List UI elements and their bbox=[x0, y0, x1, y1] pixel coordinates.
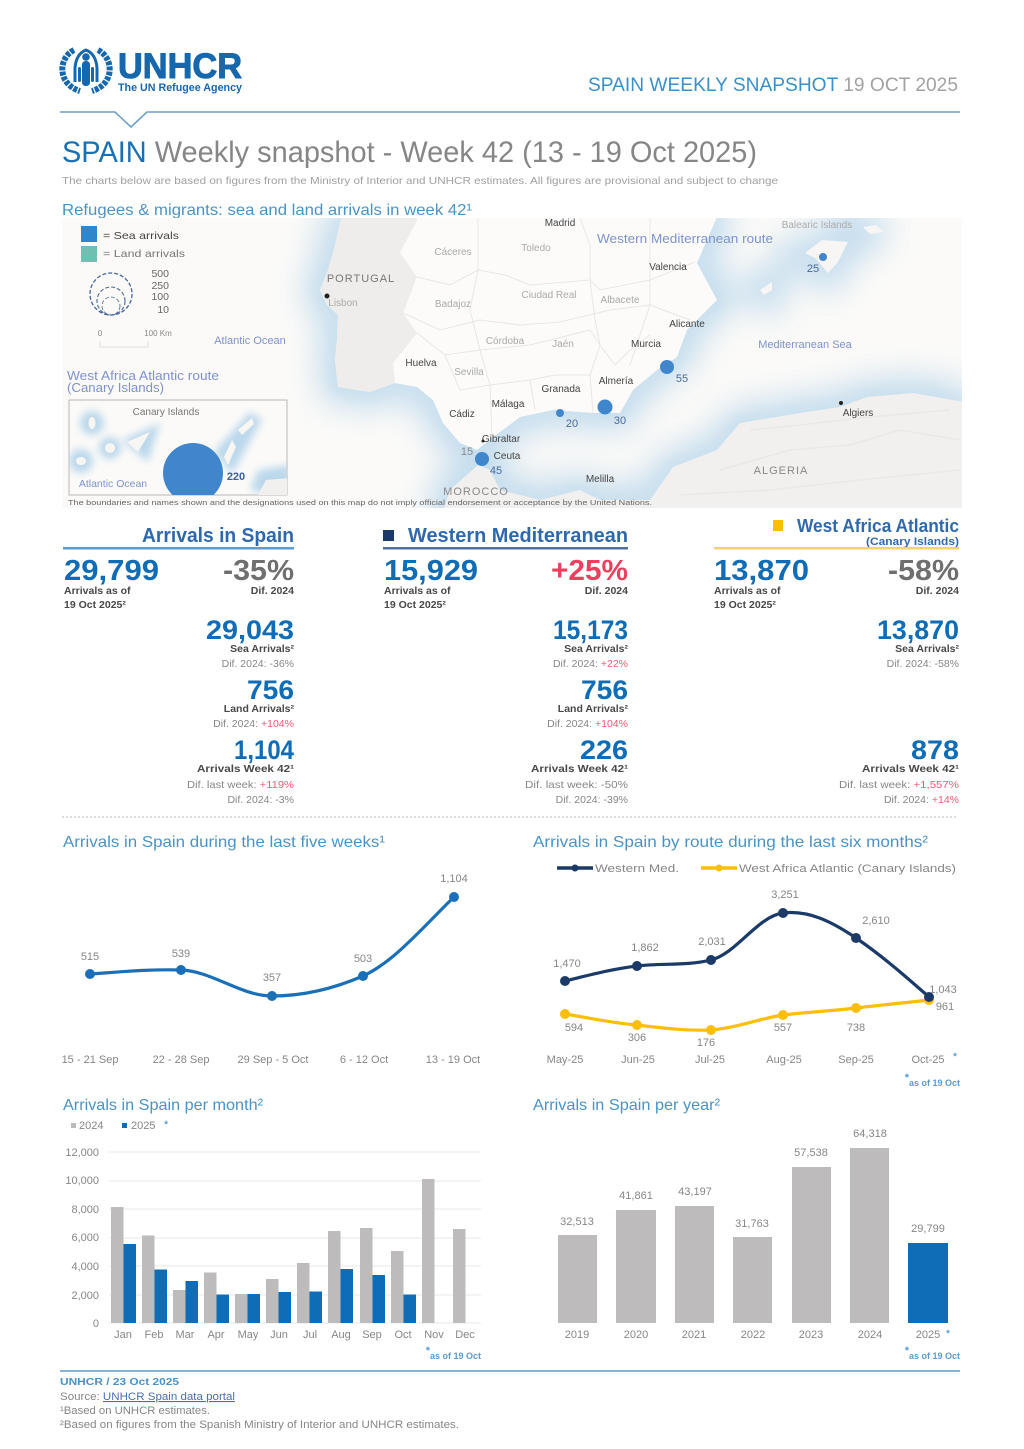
year bars bbox=[558, 1148, 948, 1323]
data labels bbox=[553, 889, 957, 1049]
chart heading: Arrivals in Spain during the last five weeks¹ bbox=[63, 834, 385, 851]
narrow coastal glow bbox=[320, 210, 970, 520]
sea arrivals: Dif. 2024: +22% bbox=[553, 658, 628, 670]
grid lines and y axis: 0 bbox=[93, 1318, 99, 1330]
line series bbox=[90, 897, 454, 996]
UNHCR logo bbox=[62, 47, 243, 94]
month labels: May bbox=[238, 1329, 259, 1341]
as-of note: as of 19 Oct bbox=[909, 1351, 960, 1361]
data labels: 306 bbox=[628, 1032, 646, 1044]
grid lines and y axis: 2,000 bbox=[71, 1290, 99, 1302]
as-of note: as of 19 Oct bbox=[909, 1078, 960, 1088]
sea and route labels: Atlantic Ocean bbox=[214, 335, 286, 347]
map place labels: Gibraltar bbox=[482, 434, 521, 445]
bar value labels: 31,763 bbox=[735, 1218, 769, 1230]
weekly arrivals: 226 bbox=[580, 735, 628, 765]
map place labels: Huelva bbox=[405, 358, 437, 369]
year difference: -58% bbox=[888, 555, 959, 587]
weekly arrivals: Arrivals Week 42¹ bbox=[531, 763, 629, 775]
bar value labels: 32,513 bbox=[560, 1216, 594, 1228]
grid lines and y axis: 4,000 bbox=[71, 1261, 99, 1273]
weekly arrivals: 878 bbox=[911, 735, 959, 765]
province borders bbox=[403, 218, 695, 438]
year labels: 2025 bbox=[916, 1329, 940, 1341]
chart: per month bbox=[63, 1097, 481, 1361]
total arrivals: 19 Oct 2025² bbox=[384, 599, 446, 611]
land arrivals bbox=[213, 675, 294, 730]
data labels: 357 bbox=[263, 972, 281, 984]
logo wordmark: UNHCR bbox=[118, 47, 242, 86]
year labels: 2022 bbox=[741, 1329, 765, 1341]
arrival circles bbox=[475, 253, 827, 466]
total arrivals: 13,870 bbox=[714, 555, 809, 587]
inset: Canary Islands: 220 bbox=[227, 471, 245, 483]
heading: Arrivals in Spain bbox=[142, 525, 294, 547]
year difference: Dif. 2024 bbox=[251, 585, 294, 597]
inset: Canary Islands: Atlantic Ocean bbox=[79, 478, 147, 490]
map heading: Refugees & migrants: sea and land arrivals in week 42¹ bbox=[62, 202, 472, 219]
month axis labels: Oct-25 bbox=[911, 1054, 945, 1066]
month axis labels: * bbox=[953, 1051, 958, 1063]
chart: by route, six months bbox=[533, 834, 960, 1088]
year labels: 2024 bbox=[858, 1329, 882, 1341]
chart: per year bbox=[533, 1097, 960, 1361]
data labels: 1,862 bbox=[631, 942, 659, 954]
map place labels: Badajoz bbox=[435, 299, 471, 310]
map geography bbox=[320, 210, 970, 520]
sea arrivals bbox=[877, 615, 959, 670]
chart: last five weeks bbox=[62, 834, 480, 1066]
land arrivals: Dif. 2024: +104% bbox=[213, 718, 294, 730]
title: SPAIN Weekly snapshot - Week 42 (13 - 19 Oct 2025) bbox=[62, 136, 757, 169]
map legend: 250 bbox=[151, 280, 169, 292]
arrival numbers: 55 bbox=[676, 373, 688, 385]
heading: Western Mediterranean bbox=[408, 525, 628, 547]
map place labels: Ceuta bbox=[494, 451, 521, 462]
heading: (Canary Islands) bbox=[866, 536, 959, 548]
arrival numbers bbox=[461, 263, 819, 477]
total arrivals: Arrivals as of bbox=[714, 585, 781, 597]
panel: arrivals in Spain bbox=[63, 525, 295, 806]
chart heading: Arrivals in Spain per year² bbox=[533, 1097, 721, 1114]
sea arrivals: 13,870 bbox=[877, 615, 959, 645]
week axis labels: 13 - 19 Oct bbox=[426, 1054, 480, 1066]
heading bbox=[714, 516, 959, 550]
month labels: Jan bbox=[114, 1329, 132, 1341]
map place labels: Granada bbox=[542, 384, 581, 395]
weekly arrivals: Dif. 2024: -39% bbox=[556, 794, 628, 806]
footnote 2: ²Based on figures from the Spanish Ministry of Interior and UNHCR estimates. bbox=[60, 1419, 459, 1431]
arrival numbers: 30 bbox=[614, 415, 626, 427]
inset: Canary Islands bbox=[69, 400, 290, 503]
year difference: +25% bbox=[551, 555, 628, 587]
weekly arrivals: Arrivals Week 42¹ bbox=[197, 763, 295, 775]
week axis labels bbox=[62, 1054, 480, 1066]
sea and route labels: (Canary Islands) bbox=[67, 381, 164, 395]
data labels bbox=[81, 873, 468, 984]
year labels bbox=[565, 1328, 951, 1341]
month labels: Jun bbox=[270, 1329, 288, 1341]
weekly arrivals bbox=[525, 735, 629, 806]
heading: West Africa Atlantic bbox=[797, 516, 959, 536]
total arrivals bbox=[384, 555, 478, 611]
arrival numbers: 20 bbox=[566, 418, 578, 430]
total arrivals: 19 Oct 2025² bbox=[64, 599, 126, 611]
legend bbox=[557, 863, 956, 875]
weekly arrivals: 1,104 bbox=[234, 735, 294, 765]
Western Mediterranean line bbox=[560, 908, 934, 1002]
month axis labels: Jun-25 bbox=[621, 1054, 655, 1066]
map place labels: Córdoba bbox=[486, 336, 525, 347]
land arrivals: 756 bbox=[581, 675, 628, 705]
month axis labels: Aug-25 bbox=[766, 1054, 802, 1066]
month axis labels bbox=[547, 1051, 958, 1066]
logo wreath emblem bbox=[62, 50, 110, 91]
data labels: 961 bbox=[936, 1001, 954, 1013]
grid lines and y axis: 6,000 bbox=[71, 1232, 99, 1244]
2025 bars bbox=[124, 1244, 416, 1323]
month axis labels: May-25 bbox=[547, 1054, 583, 1066]
as-of note: as of 19 Oct bbox=[430, 1351, 481, 1361]
year labels: 2019 bbox=[565, 1329, 589, 1341]
map place labels: MOROCCO bbox=[443, 486, 509, 498]
month labels: Mar bbox=[176, 1329, 195, 1341]
map place labels: Cádiz bbox=[449, 409, 475, 420]
total arrivals: 19 Oct 2025² bbox=[714, 599, 776, 611]
weekly arrivals bbox=[839, 735, 960, 806]
chart heading: Arrivals in Spain per month² bbox=[63, 1097, 264, 1114]
month labels: Feb bbox=[145, 1329, 163, 1341]
total arrivals bbox=[714, 555, 809, 611]
grid lines and y axis: 8,000 bbox=[71, 1204, 99, 1216]
month labels: Apr bbox=[207, 1329, 225, 1341]
Africa texture bbox=[680, 410, 960, 495]
legend: * bbox=[164, 1119, 169, 1131]
footer bbox=[60, 1371, 960, 1431]
map place labels: PORTUGAL bbox=[327, 273, 395, 285]
legend: 2025 bbox=[131, 1120, 155, 1132]
total arrivals: Arrivals as of bbox=[64, 585, 131, 597]
sea arrivals: Dif. 2024: -58% bbox=[887, 658, 959, 670]
bar value labels: 41,861 bbox=[619, 1190, 653, 1202]
map place labels: Algiers bbox=[843, 408, 873, 419]
header rule with chevron bbox=[60, 112, 960, 127]
data labels: 503 bbox=[354, 953, 372, 965]
map legend bbox=[81, 226, 185, 347]
wide coastal glow bbox=[320, 210, 970, 520]
sea arrivals: Dif. 2024: -36% bbox=[222, 658, 294, 670]
bar value labels bbox=[560, 1128, 945, 1235]
year labels: 2021 bbox=[682, 1329, 706, 1341]
map legend: = Land arrivals bbox=[103, 248, 185, 260]
as-of note: * bbox=[426, 1345, 431, 1357]
sea arrivals: Sea Arrivals² bbox=[230, 643, 294, 655]
month labels: Sep bbox=[362, 1329, 382, 1341]
data labels: 738 bbox=[847, 1022, 865, 1034]
land arrivals bbox=[547, 675, 628, 730]
map place labels: Murcia bbox=[631, 339, 661, 350]
map place labels: Sevilla bbox=[454, 367, 484, 378]
land arrivals: 756 bbox=[247, 675, 294, 705]
data labels: 1,104 bbox=[440, 873, 468, 885]
map place labels: Jaén bbox=[552, 339, 574, 350]
week axis labels: 15 - 21 Sep bbox=[62, 1054, 118, 1066]
data labels: 515 bbox=[81, 951, 99, 963]
West Africa Atlantic line bbox=[560, 995, 934, 1035]
week axis labels: 29 Sep - 5 Oct bbox=[238, 1054, 308, 1066]
map legend: 10 bbox=[157, 304, 169, 316]
month labels: Oct bbox=[394, 1329, 412, 1341]
weekly arrivals: Dif. last week: +1,557% bbox=[839, 779, 959, 791]
map legend: 100 bbox=[151, 291, 169, 303]
sea and route labels bbox=[67, 232, 853, 395]
month labels: Aug bbox=[331, 1329, 351, 1341]
panel: Western Mediterranean bbox=[383, 525, 629, 806]
map place labels: Melilla bbox=[586, 474, 615, 485]
map place labels: Madrid bbox=[545, 218, 575, 229]
footer source: Source: UNHCR Spain data portal bbox=[60, 1391, 235, 1403]
arrival numbers: 45 bbox=[490, 465, 502, 477]
legend: Western Med. bbox=[595, 863, 679, 875]
weekly arrivals bbox=[187, 735, 295, 806]
land arrivals: Land Arrivals² bbox=[558, 703, 628, 715]
Balearic islands bbox=[760, 225, 884, 295]
legend: West Africa Atlantic (Canary Islands) bbox=[739, 863, 956, 875]
grid lines and y axis bbox=[65, 1147, 481, 1330]
data labels: 1,043 bbox=[929, 984, 957, 996]
weekly arrivals: Dif. 2024: +14% bbox=[884, 794, 959, 806]
sea and route labels: West Africa Atlantic route bbox=[67, 369, 219, 383]
sea arrivals: 29,043 bbox=[206, 615, 294, 645]
map legend: 100 Km bbox=[144, 329, 172, 338]
North Africa land bbox=[444, 393, 962, 508]
weekly arrivals: Dif. last week: +119% bbox=[187, 779, 294, 791]
header label: SPAIN WEEKLY SNAPSHOT 19 OCT 2025 bbox=[588, 75, 958, 96]
map disclaimer: The boundaries and names shown and the designations used on this map do not imply official endorsement or acceptance by the United Nations. bbox=[68, 498, 652, 507]
legend bbox=[71, 1119, 169, 1132]
map base bbox=[62, 218, 962, 508]
map place labels: Alicante bbox=[669, 319, 705, 330]
panel: map bbox=[62, 210, 970, 520]
map place labels: Toledo bbox=[521, 243, 551, 254]
map place labels: Cáceres bbox=[434, 247, 472, 258]
arrival numbers: 15 bbox=[461, 446, 473, 458]
grid lines and y axis: 10,000 bbox=[65, 1175, 99, 1187]
data labels: 1,470 bbox=[553, 958, 581, 970]
total arrivals: 15,929 bbox=[384, 555, 478, 587]
map legend: 500 bbox=[151, 268, 169, 280]
data points bbox=[85, 892, 459, 1001]
sea and route labels: Western Mediterranean route bbox=[597, 232, 773, 246]
weekly arrivals: Dif. last week: -50% bbox=[525, 779, 628, 791]
weekly arrivals: Arrivals Week 42¹ bbox=[862, 763, 960, 775]
year labels: 2020 bbox=[624, 1329, 648, 1341]
sea arrivals: Sea Arrivals² bbox=[895, 643, 959, 655]
data labels: 3,251 bbox=[771, 889, 799, 901]
map place labels: Lisbon bbox=[328, 298, 358, 309]
month axis labels: Sep-25 bbox=[838, 1054, 874, 1066]
sea arrivals bbox=[206, 615, 294, 670]
as-of note: * bbox=[905, 1072, 910, 1084]
inset: Canary Islands: Canary Islands bbox=[133, 407, 199, 418]
map place labels: Almería bbox=[599, 376, 634, 387]
weekly arrivals: Dif. 2024: -3% bbox=[227, 794, 294, 806]
year difference: -35% bbox=[223, 555, 294, 587]
map place labels bbox=[324, 218, 873, 498]
grid lines and y axis: 12,000 bbox=[65, 1147, 99, 1159]
data labels: 594 bbox=[565, 1022, 583, 1034]
sea and route labels: Mediterranean Sea bbox=[758, 339, 853, 351]
month labels: Dec bbox=[455, 1329, 475, 1341]
month labels: Jul bbox=[303, 1329, 317, 1341]
footnote 1: ¹Based on UNHCR estimates. bbox=[60, 1405, 210, 1417]
data labels: 2,031 bbox=[698, 936, 726, 948]
land arrivals: Land Arrivals² bbox=[224, 703, 294, 715]
sea arrivals: Sea Arrivals² bbox=[564, 643, 628, 655]
month axis labels: Jul-25 bbox=[695, 1054, 725, 1066]
map place labels: Málaga bbox=[492, 399, 525, 410]
logo tagline: The UN Refugee Agency bbox=[118, 82, 243, 94]
legend: 2024 bbox=[79, 1120, 103, 1132]
map place labels: Valencia bbox=[649, 262, 687, 273]
week axis labels: 22 - 28 Sep bbox=[153, 1054, 209, 1066]
map place labels: Albacete bbox=[601, 295, 640, 306]
chart heading: Arrivals in Spain by route during the last six months² bbox=[533, 834, 929, 851]
footer date: UNHCR / 23 Oct 2025 bbox=[60, 1376, 179, 1388]
subtitle note: The charts below are based on figures from the Ministry of Interior and UNHCR estimates. All figures are provisional and subject to change bbox=[62, 175, 778, 187]
sea arrivals: 15,173 bbox=[553, 615, 628, 645]
data labels: 2,610 bbox=[862, 915, 890, 927]
total arrivals: 29,799 bbox=[64, 555, 159, 587]
arrival numbers: 25 bbox=[807, 263, 819, 275]
sea arrivals bbox=[553, 615, 628, 670]
month labels bbox=[114, 1329, 475, 1341]
total arrivals: Arrivals as of bbox=[384, 585, 451, 597]
as-of note: * bbox=[905, 1345, 910, 1357]
data labels: 176 bbox=[697, 1037, 715, 1049]
map legend: 0 bbox=[98, 329, 103, 338]
map legend: = Sea arrivals bbox=[103, 230, 179, 242]
year labels: 2023 bbox=[799, 1329, 823, 1341]
map place labels: Balearic Islands bbox=[782, 220, 852, 231]
bar value labels: 29,799 bbox=[911, 1223, 945, 1235]
2024 bars bbox=[111, 1179, 466, 1323]
month labels: Nov bbox=[424, 1329, 444, 1341]
year difference: Dif. 2024 bbox=[585, 585, 628, 597]
Spain land bbox=[320, 210, 720, 450]
total arrivals bbox=[64, 555, 159, 611]
land arrivals: Dif. 2024: +104% bbox=[547, 718, 628, 730]
panel: West Africa Atlantic bbox=[714, 516, 960, 806]
year labels: * bbox=[946, 1328, 951, 1340]
bar value labels: 43,197 bbox=[678, 1186, 712, 1198]
year difference: Dif. 2024 bbox=[916, 585, 959, 597]
week axis labels: 6 - 12 Oct bbox=[340, 1054, 388, 1066]
bar value labels: 64,318 bbox=[853, 1128, 887, 1140]
data labels: 557 bbox=[774, 1022, 792, 1034]
map place labels: ALGERIA bbox=[754, 465, 808, 477]
data labels: 539 bbox=[172, 948, 190, 960]
map place labels: Ciudad Real bbox=[521, 290, 577, 301]
bar value labels: 57,538 bbox=[794, 1147, 828, 1159]
Portugal land bbox=[320, 210, 417, 392]
